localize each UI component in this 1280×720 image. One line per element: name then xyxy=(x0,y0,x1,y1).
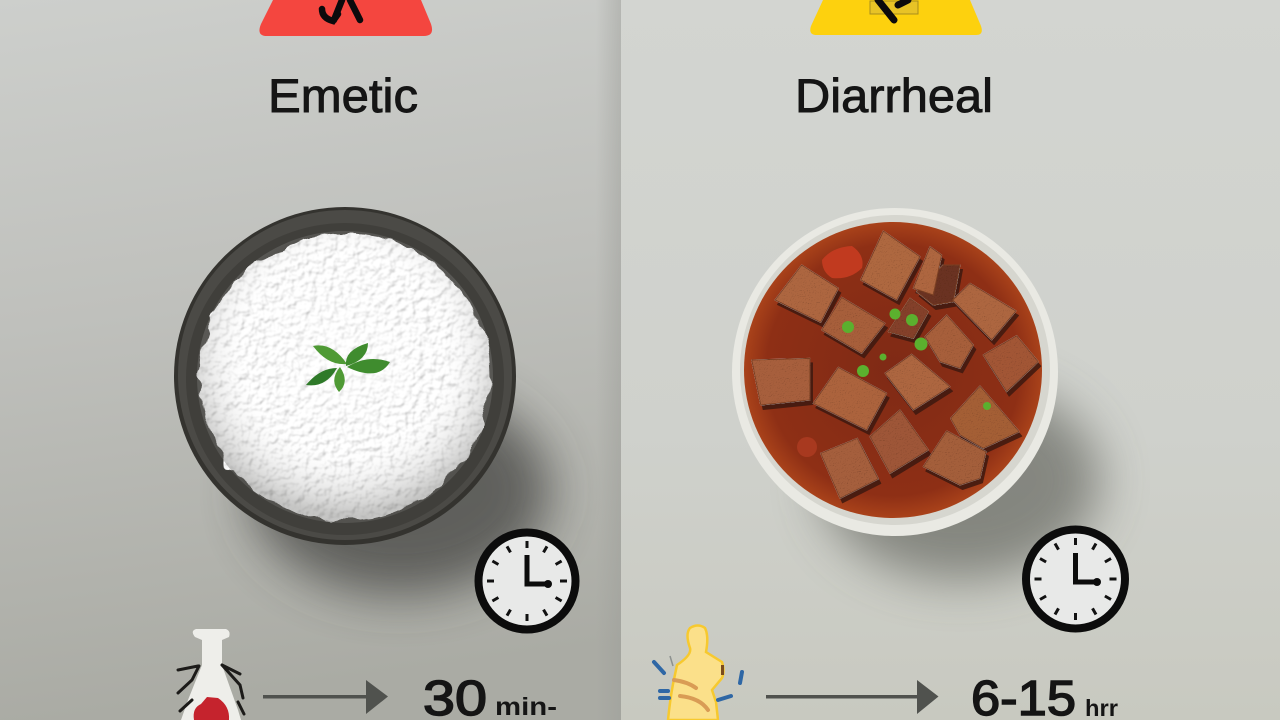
arrow: emetic onset xyxy=(263,680,388,714)
curry sauce xyxy=(744,222,1042,518)
food: bowl of beef curry xyxy=(732,208,1058,536)
garnish leaves xyxy=(306,343,390,392)
bowl shadow xyxy=(820,380,1100,580)
warning triangle: yellow xyxy=(810,0,982,35)
rice mound xyxy=(199,234,491,520)
clock: diarrheal xyxy=(1026,530,1125,628)
arrow: diarrheal onset xyxy=(766,680,938,714)
tomato pieces xyxy=(797,246,863,457)
warning triangle: red xyxy=(259,0,432,36)
green peas xyxy=(842,308,991,410)
icon: stomach flask xyxy=(178,629,244,720)
heading: Emetic: Emetic xyxy=(268,69,418,122)
bowl shadow xyxy=(250,385,550,595)
panel: diarrheal xyxy=(621,0,1280,720)
icon: yellow intestine figure xyxy=(654,626,742,720)
clock: emetic xyxy=(478,532,576,630)
heading: Diarrheal: Diarrheal xyxy=(795,69,993,122)
beef chunks xyxy=(752,231,1038,498)
onset time: 30 min xyxy=(423,672,557,720)
panel: emetic xyxy=(0,0,621,720)
food: bowl of white rice xyxy=(174,207,516,545)
onset time: 6-15 hr xyxy=(971,672,1118,720)
